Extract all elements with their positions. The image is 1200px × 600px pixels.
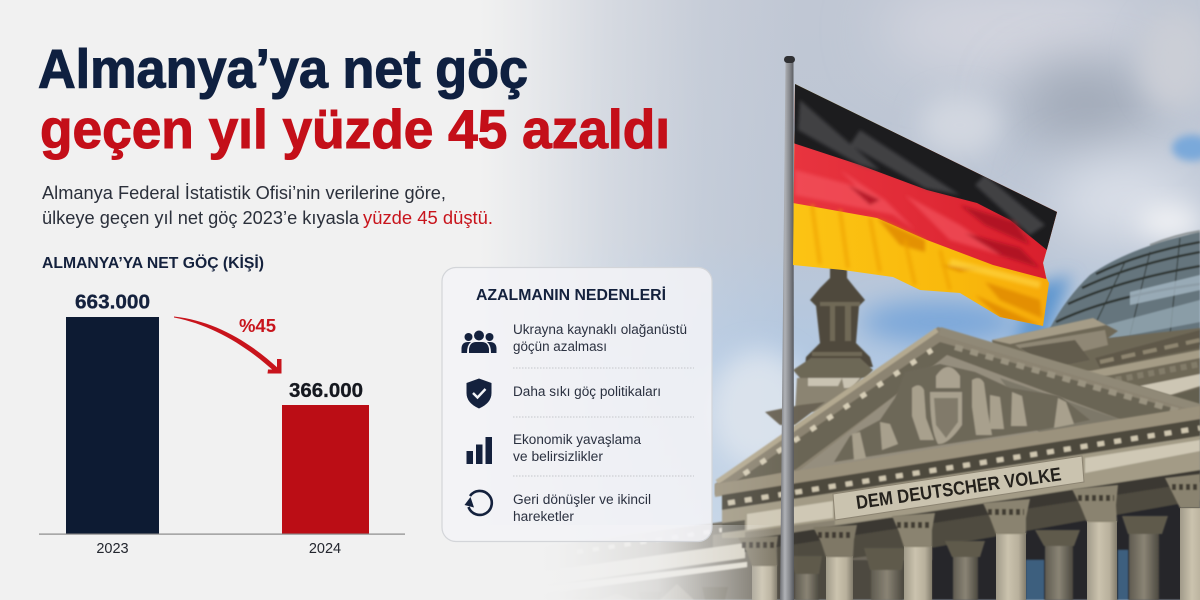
flagpole bbox=[780, 56, 795, 600]
panel: reasons for the decline bbox=[442, 268, 712, 542]
entablature bbox=[715, 406, 1200, 552]
rear columns bbox=[790, 516, 1168, 600]
inscription band: DEM DEUTSCHER VOLKE: DEM DEUTSCHER VOLKE bbox=[855, 464, 1063, 514]
German flag bbox=[785, 80, 1065, 330]
bottom-left fade over the building bbox=[470, 525, 780, 600]
front columns with Corinthian capitals bbox=[738, 474, 1200, 600]
reason 4 text: hareketler bbox=[513, 509, 574, 524]
intro text bbox=[42, 183, 493, 228]
reason 3 text: ve belirsizlikler bbox=[513, 449, 604, 464]
arrow: decrease bbox=[174, 316, 282, 374]
reason 1 text: göçün azalması bbox=[513, 339, 607, 354]
bar chart: net migration bbox=[39, 255, 405, 557]
back wing of the building bbox=[992, 318, 1200, 440]
panel card bbox=[442, 268, 712, 542]
white fade over the photo bbox=[470, 0, 810, 600]
reason 3 text: Ekonomik yavaşlama bbox=[513, 432, 641, 447]
icon: shield with check bbox=[466, 378, 492, 408]
reason 2 text: Daha sıkı göç politikaları bbox=[513, 384, 661, 399]
title line 1: Almanya’ya net göç bbox=[38, 38, 528, 100]
reason 4 text: Geri dönüşler ve ikincil bbox=[513, 492, 651, 507]
pediment sculpture group and coat of arms bbox=[834, 364, 1090, 462]
decline percentage: %45 bbox=[239, 316, 276, 336]
corner tower bbox=[765, 268, 873, 425]
reason 1 text: Ukrayna kaynaklı olağanüstü bbox=[513, 322, 687, 337]
value 2023: 663.000 bbox=[75, 292, 150, 314]
reason 4 text bbox=[513, 492, 651, 524]
title line 2: geçen yıl yüzde 45 azaldı bbox=[40, 98, 670, 160]
panel heading: AZALMANIN NEDENLERİ bbox=[476, 286, 666, 304]
year label 2023: 2023 bbox=[96, 541, 129, 557]
icon: return arrow bbox=[464, 491, 492, 515]
bar 2023 bbox=[66, 317, 159, 534]
sky bbox=[470, 0, 1200, 600]
intro highlighted figure: yüzde 45 düştü. bbox=[363, 208, 493, 228]
axis line bbox=[39, 534, 405, 535]
chart heading: ALMANYA’YA NET GÖÇ (KİŞİ) bbox=[42, 255, 264, 272]
icon: people bbox=[462, 330, 496, 353]
photo: sky with flag and Reichstag bbox=[470, 0, 1200, 600]
icon: rising bars bbox=[466, 437, 492, 464]
year label 2024: 2024 bbox=[309, 541, 341, 557]
reason 1 text bbox=[513, 322, 687, 354]
bar 2024 bbox=[282, 405, 369, 534]
intro line 1: Almanya Federal İstatistik Ofisi’nin verilerine göre, bbox=[42, 183, 446, 203]
Reichstag dome bbox=[1050, 231, 1200, 345]
facade bbox=[500, 440, 1200, 600]
intro line 2: ülkeye geçen yıl net göç 2023’e kıyasla bbox=[42, 208, 360, 228]
title bbox=[38, 38, 670, 160]
reason 3 text bbox=[513, 432, 641, 464]
value 2024: 366.000 bbox=[289, 380, 363, 402]
pediment bbox=[715, 327, 1200, 495]
